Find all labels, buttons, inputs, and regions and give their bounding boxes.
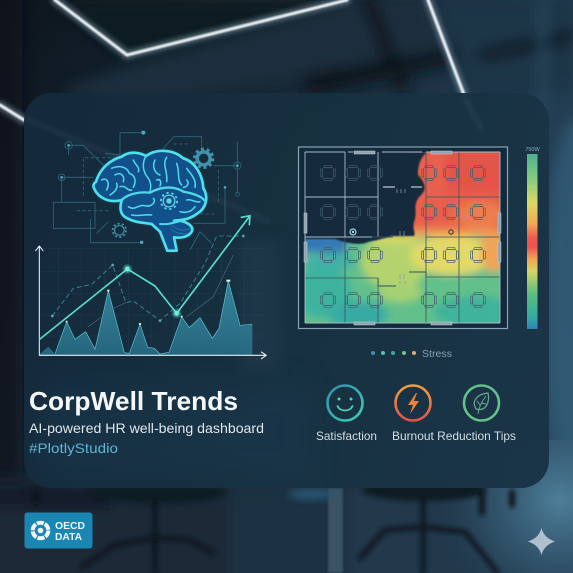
logo: OECD Data badge xyxy=(24,512,92,548)
icon: satisfaction smiley xyxy=(328,386,362,420)
dashed trend lines xyxy=(51,235,245,327)
colour scale bar xyxy=(525,147,540,329)
floor plan heatmap xyxy=(292,145,517,332)
logo: OECD Data badge: OECD xyxy=(55,521,85,532)
desk chairs xyxy=(320,166,486,308)
chart and brain illustration xyxy=(36,131,266,359)
rising trend arrow xyxy=(40,216,250,339)
icon: brain xyxy=(93,151,206,251)
subtitle: AI-powered HR well-being dashboard xyxy=(29,420,264,436)
chair silhouettes xyxy=(36,479,512,573)
icon: sparkle xyxy=(528,528,555,555)
colour scale bar: 750W xyxy=(525,147,540,153)
icon: tips leaf xyxy=(464,386,499,420)
legend: stress xyxy=(371,348,452,360)
axes xyxy=(36,246,266,359)
panel: glass dashboard card xyxy=(24,93,549,488)
ceiling lights xyxy=(0,0,466,120)
icon labels: Satisfaction xyxy=(316,429,377,443)
legend: stress: Stress xyxy=(422,348,452,360)
title: CorpWell Trends xyxy=(29,386,238,416)
icon labels xyxy=(316,429,516,443)
icon labels: Burnout Reduction Tips xyxy=(392,429,516,443)
heat layers xyxy=(305,152,500,322)
unheated zone xyxy=(305,152,427,244)
chart grid xyxy=(40,248,263,355)
hashtag: #PlotlyStudio xyxy=(29,440,118,456)
icon: gears xyxy=(113,149,213,237)
circuit lines xyxy=(53,133,241,250)
walls xyxy=(305,152,500,323)
area chart xyxy=(40,280,252,355)
logo: OECD Data badge: DATA xyxy=(55,532,82,543)
icon: burnout lightning xyxy=(396,386,430,420)
